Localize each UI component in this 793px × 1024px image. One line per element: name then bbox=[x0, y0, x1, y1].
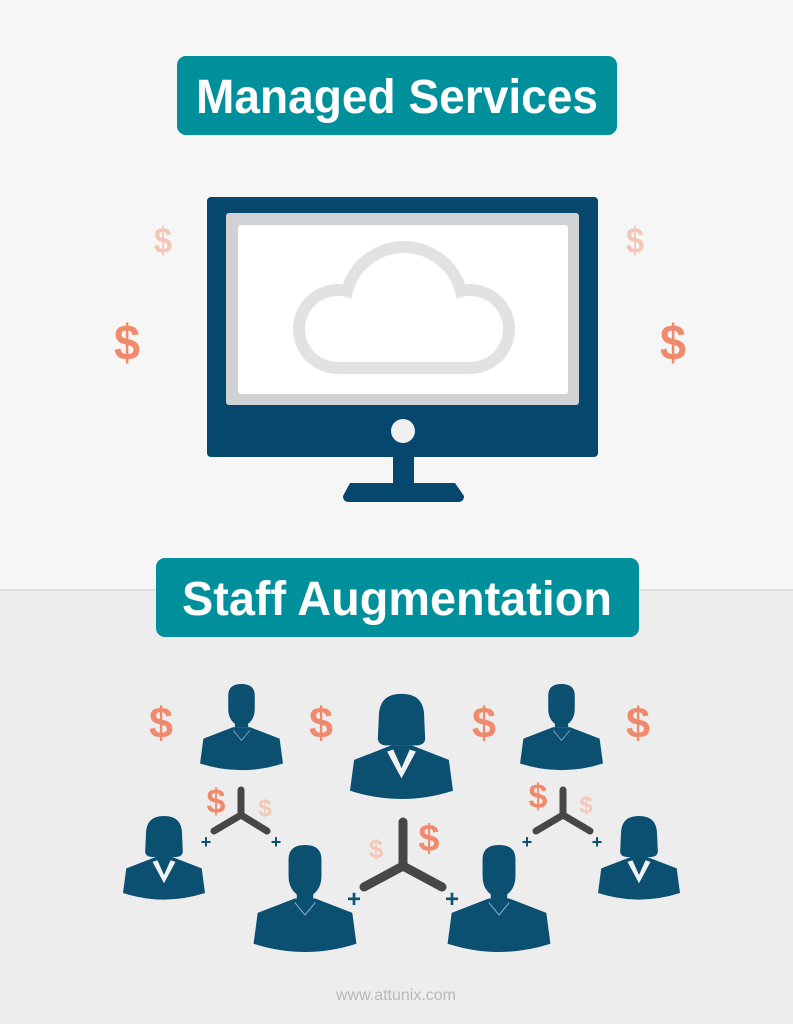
dollar signs: $ bbox=[309, 699, 333, 748]
plus signs: + bbox=[271, 832, 281, 852]
people network bbox=[123, 684, 680, 952]
dollar signs: $ bbox=[626, 699, 650, 748]
title: Staff Augmentation: Staff Augmentation bbox=[182, 573, 612, 626]
plus signs: + bbox=[201, 832, 211, 852]
connectors bbox=[214, 790, 590, 887]
dollar signs: $ bbox=[579, 792, 593, 819]
plus signs: + bbox=[445, 886, 459, 913]
dollar signs: $ bbox=[207, 783, 226, 821]
dollar signs: $ bbox=[369, 834, 384, 864]
title: Managed Services: Managed Services bbox=[196, 71, 598, 124]
title: Staff Augmentation bbox=[156, 558, 639, 637]
dollar signs: $ bbox=[529, 778, 548, 816]
title: Managed Services bbox=[177, 56, 617, 135]
dollar signs: $ bbox=[472, 699, 496, 748]
person: man 2 bbox=[520, 684, 603, 770]
icon: monitor with cloud bbox=[207, 197, 598, 502]
icons: dollar signs top bbox=[114, 220, 686, 371]
dollar signs: $ bbox=[418, 818, 440, 860]
dollar signs: $ bbox=[258, 795, 272, 822]
person: man 1 bbox=[200, 684, 283, 770]
icons: dollar signs top: $ bbox=[660, 315, 686, 371]
dollar signs: $ bbox=[149, 699, 173, 748]
person: woman 3 bbox=[598, 816, 680, 900]
icons: dollar signs top: $ bbox=[626, 220, 644, 261]
icons: dollar signs top: $ bbox=[154, 220, 172, 261]
plus signs: + bbox=[347, 886, 361, 913]
plus signs bbox=[201, 832, 602, 913]
plus signs: + bbox=[522, 832, 532, 852]
icons: dollar signs top: $ bbox=[114, 315, 140, 371]
person: woman 1 bbox=[350, 694, 453, 799]
footer url: www.attunix.com bbox=[335, 987, 456, 1004]
plus signs: + bbox=[592, 832, 602, 852]
dollar signs bbox=[149, 699, 650, 864]
person: man 4 bbox=[448, 845, 550, 952]
person: man 3 bbox=[254, 845, 356, 952]
person: woman 2 bbox=[123, 816, 205, 900]
